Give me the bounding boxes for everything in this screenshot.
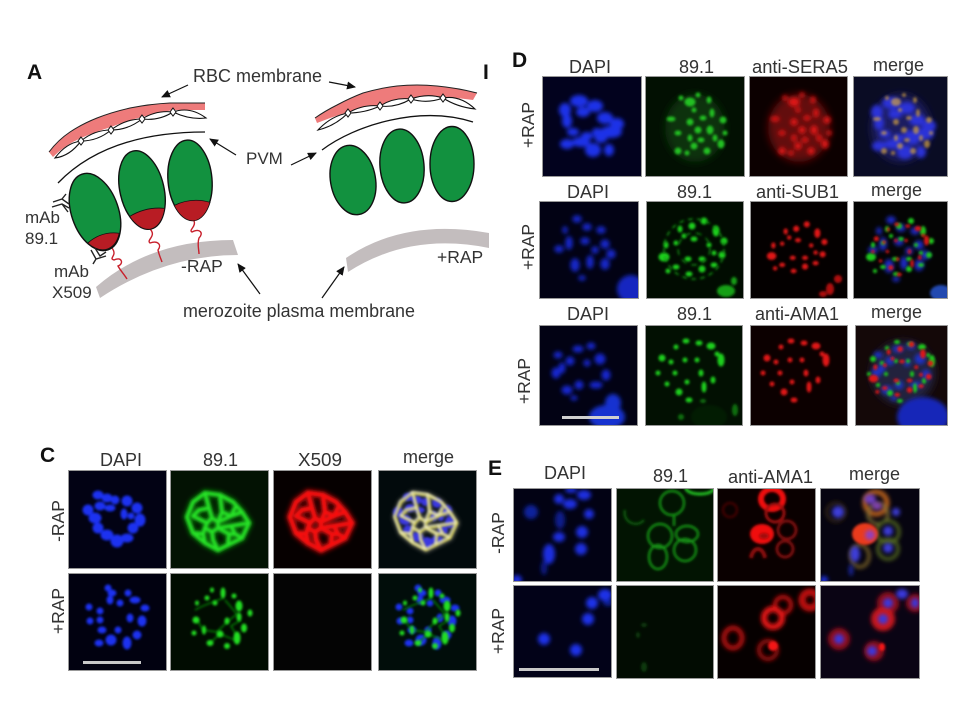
antibody icon: mAb X509 (91, 248, 106, 264)
image: D row 1 DAPI (542, 76, 642, 177)
image: D row 3 merge (855, 325, 948, 426)
right merozoite 2 (377, 127, 427, 205)
column header merge: merge (403, 447, 454, 467)
image: D row 3 anti-AMA1 (750, 325, 848, 426)
image: E -RAP merge (820, 488, 920, 582)
image: C +RAP X509 (273, 573, 372, 671)
antibody icon: mAb 89.1 (52, 194, 69, 212)
image: E +RAP merge (820, 585, 920, 679)
image: C -RAP 89.1 (170, 470, 269, 569)
left RBC membrane band (49, 103, 206, 158)
column header X509: X509 (298, 450, 342, 470)
tether 3 (191, 219, 201, 254)
image: E +RAP DAPI (513, 585, 612, 678)
right merozoite 1 (325, 142, 381, 218)
image: C -RAP X509 (273, 470, 372, 569)
row 3 header merge: merge (871, 302, 922, 322)
left merozoite 2 (112, 146, 172, 234)
panel letter A: A (27, 61, 42, 84)
row 1 header DAPI: DAPI (569, 57, 611, 77)
right merozoite 3 (430, 126, 474, 202)
label: mAb 89.1: mAb (25, 208, 60, 227)
row 2 label +RAP: +RAP (518, 224, 538, 270)
column header DAPI: DAPI (100, 450, 142, 470)
image: D row 3 89.1 (645, 325, 743, 426)
image: D row 1 anti-SERA5 (749, 76, 848, 177)
image: C +RAP merge (378, 573, 477, 671)
label: mAb X509: mAb (54, 262, 89, 281)
label: RBC membrane: RBC membrane (193, 66, 322, 86)
row 2 header merge: merge (871, 180, 922, 200)
image: E +RAP 89.1 (616, 585, 714, 679)
row label -RAP: -RAP (48, 500, 68, 542)
row 1 header anti-SERA5: anti-SERA5 (752, 57, 848, 77)
arrow: PVM left (210, 139, 236, 155)
image: D row 1 merge (853, 76, 948, 177)
right plasma membrane (346, 229, 489, 272)
image: D row 2 89.1 (646, 201, 744, 299)
tether 2 (149, 229, 162, 262)
row 2 header 89.1: 89.1 (677, 182, 712, 202)
row 1 header 89.1: 89.1 (679, 57, 714, 77)
image: C +RAP DAPI (68, 573, 167, 671)
scale bar C (83, 661, 141, 664)
label: merozoite plasma membrane: merozoite plasma membrane (183, 301, 415, 321)
tether 1 (112, 248, 127, 279)
row label +RAP: +RAP (488, 608, 508, 654)
left merozoite 3 (165, 138, 215, 223)
arrow: plasma membrane left (238, 264, 260, 294)
column header anti-AMA1: anti-AMA1 (728, 467, 813, 487)
image: E -RAP anti-AMA1 (717, 488, 816, 582)
image: D row 1 89.1 (645, 76, 745, 177)
row 3 label +RAP: +RAP (514, 358, 534, 404)
column header 89.1: 89.1 (203, 450, 238, 470)
left merozoite 1 (60, 167, 130, 257)
image: C -RAP DAPI (68, 470, 167, 569)
arrow: RBC right (329, 82, 355, 87)
panel letter D: D (512, 49, 527, 72)
panel letter E: E (488, 457, 502, 480)
label: mAb X509: X509 (52, 283, 92, 302)
right RBC membrane band (315, 85, 477, 130)
row 2 header DAPI: DAPI (567, 182, 609, 202)
panel D: +RAP markers grid (512, 49, 952, 437)
label: PVM: PVM (246, 149, 283, 168)
column header 89.1: 89.1 (653, 466, 688, 486)
image: E -RAP DAPI (513, 488, 612, 582)
clipped panel letter fragment: I (483, 61, 489, 84)
image: E +RAP anti-AMA1 (717, 585, 816, 679)
image: D row 2 anti-SUB1 (750, 201, 848, 299)
arrow: PVM right (291, 153, 316, 165)
panel E: merozoite grid (488, 457, 924, 679)
left PVM line (58, 132, 205, 183)
panel C: immunofluorescence grid (40, 444, 477, 671)
row 3 header anti-AMA1: anti-AMA1 (755, 304, 839, 324)
row 2 header anti-SUB1: anti-SUB1 (756, 182, 839, 202)
panel letter C: C (40, 444, 55, 467)
image: D row 2 DAPI (539, 201, 639, 299)
scale bar E (519, 668, 599, 671)
image: D row 2 merge (853, 201, 948, 299)
row 1 header merge: merge (873, 55, 924, 75)
image: C +RAP 89.1 (170, 573, 269, 671)
row 3 header 89.1: 89.1 (677, 304, 712, 324)
row 3 header DAPI: DAPI (567, 304, 609, 324)
left plasma membrane (96, 240, 238, 298)
image: E -RAP 89.1 (616, 488, 714, 582)
arrow: plasma membrane right (322, 267, 344, 298)
panel A: membrane schematic (25, 61, 489, 321)
column header merge: merge (849, 464, 900, 484)
image: D row 3 DAPI (539, 325, 638, 426)
column header DAPI: DAPI (544, 463, 586, 483)
scale bar D (562, 416, 619, 419)
label: +RAP: +RAP (437, 247, 483, 267)
arrow: RBC left (162, 85, 188, 97)
right PVM line (322, 116, 473, 150)
row label +RAP: +RAP (48, 588, 68, 634)
image: C -RAP merge (378, 470, 477, 569)
label: mAb 89.1: 89.1 (25, 229, 58, 248)
row 1 label +RAP: +RAP (518, 102, 538, 148)
label: -RAP: -RAP (181, 256, 223, 276)
row label -RAP: -RAP (488, 512, 508, 554)
